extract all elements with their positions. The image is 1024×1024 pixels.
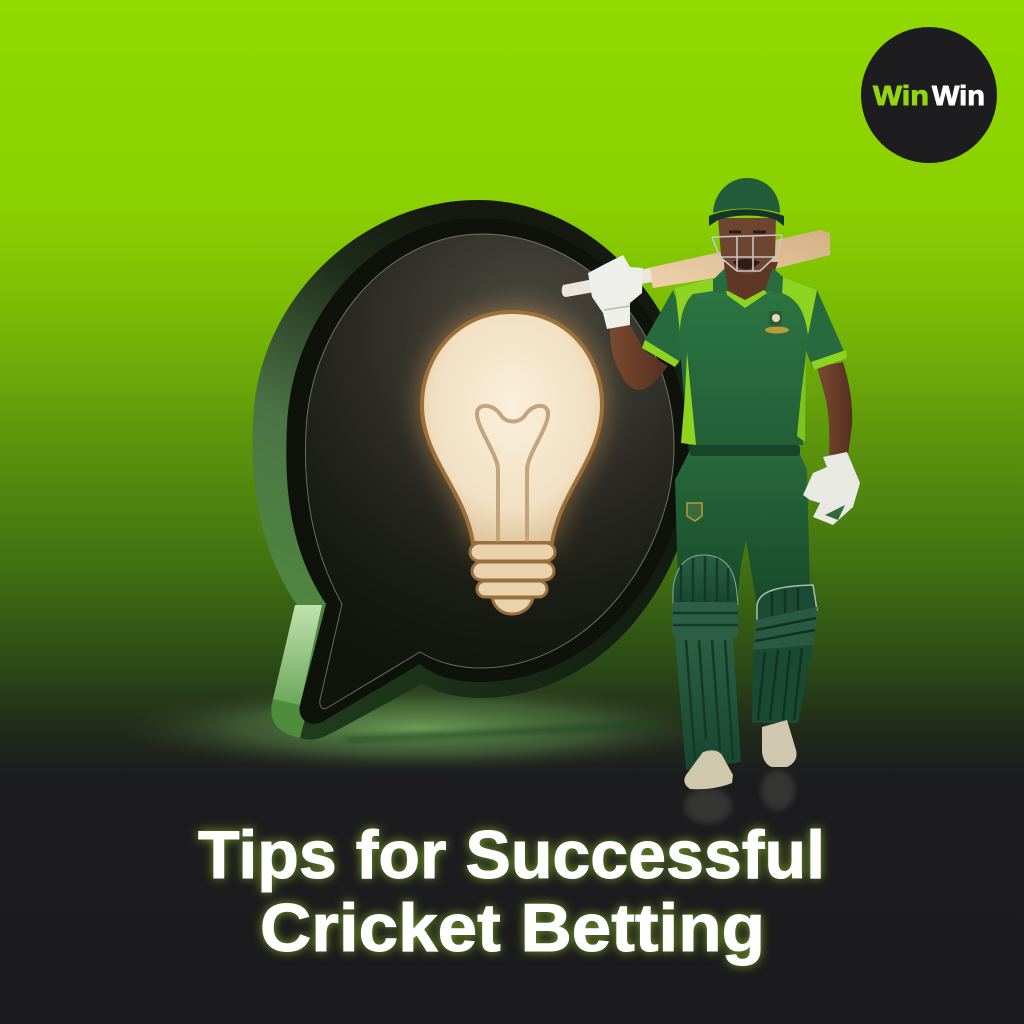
left shoe: [684, 750, 733, 789]
bubble inner frame: [286, 218, 688, 724]
back arm: [610, 325, 668, 390]
title: [198, 817, 825, 966]
right hand glove: [803, 452, 860, 525]
floor contact shadow: [340, 722, 660, 742]
bulb filament: [477, 406, 548, 543]
bubble face: [305, 234, 674, 709]
floor glow: [120, 684, 720, 772]
waistband: [690, 445, 800, 456]
bubble lower rim: [300, 450, 698, 740]
left hand glove on bat: [588, 255, 643, 329]
helmet: [709, 178, 784, 226]
bulb glow: [420, 310, 604, 545]
right shoe: [762, 720, 797, 767]
jersey collar: [713, 268, 783, 308]
cricket player: [562, 178, 860, 824]
front arm: [817, 362, 852, 455]
speech bubble with lightbulb: [253, 200, 698, 740]
title: Tips for Successful: [198, 817, 825, 893]
left batting pad: [672, 555, 741, 770]
right batting pad: [752, 585, 817, 723]
shirt sleeves: [643, 290, 690, 365]
logo badge: Win: [873, 80, 929, 111]
neck: [724, 262, 778, 302]
helmet grille: [712, 235, 782, 271]
jersey body: [675, 277, 817, 445]
player reflection: [684, 770, 795, 824]
logo badge: [861, 27, 997, 163]
bulb screw base: [470, 543, 555, 614]
trousers: [675, 450, 810, 606]
jersey crest: [765, 311, 789, 334]
cricket bat: [562, 230, 830, 297]
lightbulb glass: [422, 312, 602, 543]
title: Cricket Betting: [260, 890, 765, 966]
head: [718, 218, 776, 274]
bubble outer rim: [253, 200, 698, 739]
logo badge: Win: [932, 80, 985, 111]
trouser crest: [687, 503, 702, 521]
bubble tail highlight: [273, 605, 322, 705]
sleeve cuffs: [642, 340, 679, 367]
jersey lime panels: [675, 278, 713, 332]
